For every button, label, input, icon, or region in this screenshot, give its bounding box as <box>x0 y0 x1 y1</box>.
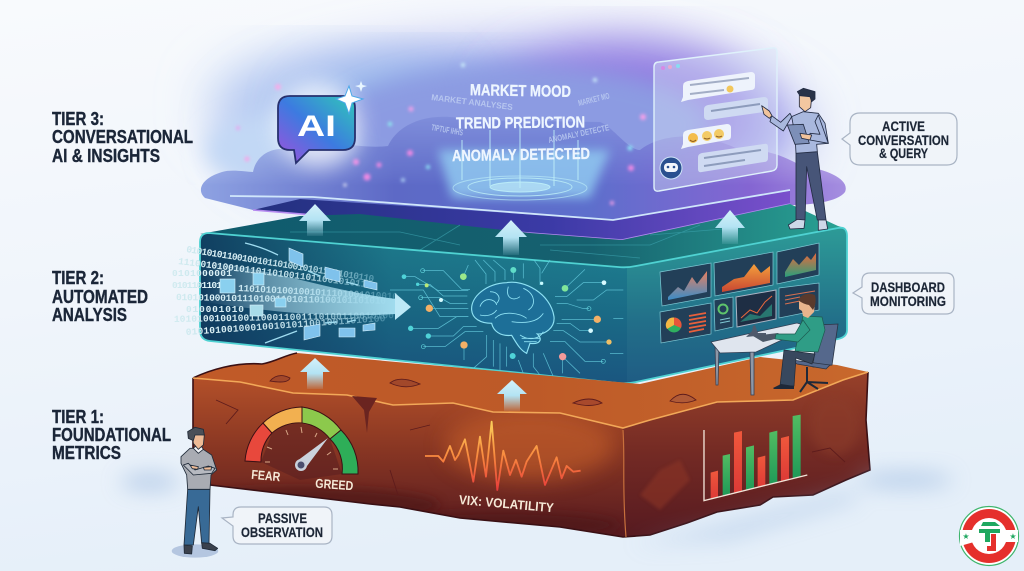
callout: active conversation and query: CONVERSATION <box>858 133 949 148</box>
front right face <box>627 228 847 384</box>
brain folds <box>480 287 543 342</box>
circuit traces <box>390 260 623 377</box>
rock cracks and boulders <box>216 376 845 537</box>
callout: active conversation and query: ACTIVE <box>882 119 925 134</box>
logo stars: ★ <box>962 532 970 541</box>
ground shadow <box>172 544 218 558</box>
panel: tier 1 foundational metrics rock <box>160 353 870 539</box>
tier 2 heading <box>52 268 148 325</box>
rock outline <box>193 372 870 537</box>
tier 3 heading: AI & INSIGHTS <box>52 146 160 166</box>
logo stars: ★ <box>1009 532 1017 541</box>
hologram text: market insights: ANOMALY DETECTE <box>547 122 610 145</box>
shoes <box>788 219 828 230</box>
seated person torso <box>795 316 825 352</box>
shadow under rock <box>120 473 953 545</box>
chat bubble 1 <box>681 72 755 102</box>
workstation: dashboard monitoring desk and seated person <box>711 290 838 395</box>
head <box>192 433 204 449</box>
rock front right face <box>623 372 870 537</box>
torso <box>181 448 217 489</box>
dashboard pie and bars <box>660 303 711 343</box>
callout: passive observation <box>222 507 332 544</box>
dashboard chart 1 <box>660 263 711 306</box>
VIX volatility line: VIX: VOLATILITY <box>458 492 555 515</box>
tier 1 heading <box>52 407 171 463</box>
torso <box>792 112 828 153</box>
binary data stream: 01010100010111010011010110100101101010 <box>176 292 386 307</box>
binary data stream: 0101000001 <box>172 268 232 279</box>
background glow <box>205 45 805 215</box>
binary data stream: 0101010010001001010110010011010100 <box>185 313 386 338</box>
seated person head <box>798 294 816 318</box>
callout: active conversation and query <box>842 113 957 165</box>
callout: passive observation: PASSIVE <box>258 511 307 526</box>
hologram rings <box>453 125 587 200</box>
binary data stream: 0101101101 <box>172 280 222 291</box>
desk <box>711 323 810 395</box>
hologram light cone <box>438 150 610 198</box>
dashboard donut <box>714 297 733 331</box>
tier 2 heading: TIER 2: <box>52 268 104 288</box>
dashboard chart 3 <box>777 243 819 284</box>
hologram text: market insights: MARKET MOOD <box>470 82 571 101</box>
panel: tier 2 automated analysis box <box>172 204 847 384</box>
keyboard <box>753 333 783 342</box>
collar <box>193 447 203 453</box>
dashboard chart 4 <box>779 283 819 318</box>
bot avatar <box>660 157 682 179</box>
binary data stream: 010001010 <box>186 304 244 315</box>
platform slab <box>253 190 790 240</box>
logo T letters <box>979 522 1000 551</box>
dashboard wall panels <box>660 243 819 343</box>
platform edges <box>230 190 790 240</box>
brain outline <box>472 282 554 353</box>
fear and greed gauge: GREED <box>315 476 354 493</box>
small motion arrows <box>245 243 358 343</box>
AI chat bubble icon: AI <box>297 110 336 143</box>
tablet <box>787 124 809 144</box>
hologram text: market insights: TIPTUF IHHS <box>431 122 464 138</box>
tier 3 heading: TIER 3: <box>52 109 104 129</box>
logo stars <box>962 532 1017 541</box>
chat bubble 2 <box>704 97 768 120</box>
circuit nodes <box>402 267 612 363</box>
monitor <box>736 290 776 337</box>
gauge labels: FEAR <box>251 467 281 484</box>
callout: active conversation and query: & QUERY <box>879 146 928 161</box>
gauge needle <box>295 438 328 471</box>
chat window panel <box>654 48 777 191</box>
dashboard chart 2 <box>714 252 773 296</box>
callout: dashboard monitoring: DASHBOARD <box>871 280 945 295</box>
tier 3 heading <box>52 109 193 166</box>
AI chat bubble icon <box>276 81 367 167</box>
box top surface <box>200 204 847 268</box>
VIX volatility line <box>425 422 581 515</box>
legs <box>796 152 826 220</box>
brain and circuit board <box>390 260 623 377</box>
rock top surface <box>193 353 868 429</box>
person: passive observation standing <box>172 427 218 558</box>
binary data stream: 10101001001001100011001110100110010100 <box>174 310 394 325</box>
hologram text: market insights: TREND PREDICTION <box>456 114 585 133</box>
pointing arm and hand <box>762 106 792 131</box>
chair <box>792 324 838 392</box>
tier 2 heading: ANALYSIS <box>52 305 127 325</box>
seated person arm <box>775 320 810 342</box>
flying documents <box>220 248 377 340</box>
binary data stream: 11010101001001011101001010010 <box>238 283 398 302</box>
red and green bar chart <box>704 415 807 501</box>
hologram text: market insights: MARKET ANALYSES <box>431 92 514 112</box>
tier 2 heading: AUTOMATED <box>52 287 148 307</box>
fear and greed gauge <box>245 407 358 493</box>
tier 1 heading: METRICS <box>52 443 121 463</box>
cloud layer <box>200 117 846 220</box>
chat bubble 3: emojis <box>681 124 731 149</box>
binary data stream <box>172 244 398 338</box>
head <box>799 95 812 112</box>
seated person legs <box>780 350 815 386</box>
chat bubble 4 <box>698 144 768 172</box>
hologram text: market insights: ANOMALY DETECTED <box>452 146 590 165</box>
rock front left face <box>193 378 623 537</box>
crossed arms <box>183 463 215 475</box>
hair <box>797 88 815 102</box>
front left face <box>200 233 627 384</box>
tier 1 heading: TIER 1: <box>52 407 104 427</box>
converging arrow <box>205 262 411 320</box>
sparkle particles <box>236 63 646 205</box>
tier 1 heading: FOUNDATIONAL <box>52 425 171 445</box>
hologram text: market insights: MARKET MO <box>577 90 611 108</box>
person: active conversation standing <box>762 88 828 230</box>
logo badge <box>960 506 1018 566</box>
tier 3 heading: CONVERSATIONAL <box>52 127 193 147</box>
binary data stream: 11100101001011011010011011001010111 <box>178 256 373 291</box>
callout: dashboard monitoring <box>853 273 954 314</box>
shoes <box>184 543 218 554</box>
supporting arm and hand <box>800 115 828 143</box>
legs <box>184 489 210 545</box>
binary data stream: 0101010110010010110100101011001010110 <box>186 244 375 285</box>
rock glowing edge <box>193 372 868 428</box>
hologram text: market insights <box>431 82 611 165</box>
callout: passive observation: OBSERVATION <box>241 525 323 540</box>
tier arrows <box>299 204 745 411</box>
panel: tier 3 conversational AI hologram <box>201 45 846 240</box>
box edges <box>200 228 847 383</box>
seated person shoes <box>773 384 794 389</box>
callout: dashboard monitoring: MONITORING <box>870 294 946 309</box>
hair <box>188 427 204 441</box>
